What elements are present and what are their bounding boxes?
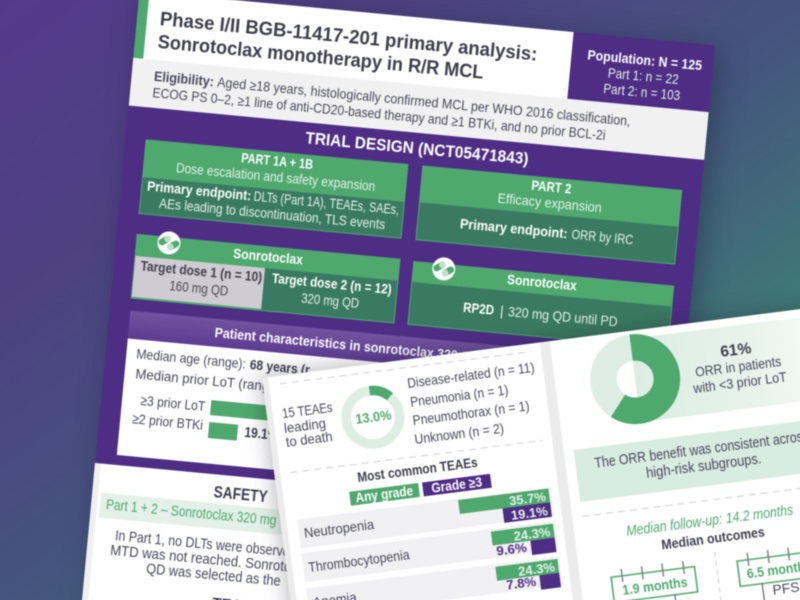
text: TEAEs leading to death: to death [285, 428, 333, 450]
eligibility [129, 58, 709, 160]
text: TEAEs leading to death: leading [283, 415, 327, 436]
panel: ORR in patients with fewer than 3 prior LoT [599, 311, 800, 426]
panel: part 2 [415, 165, 682, 265]
list: causes of death: Unknown (n = 2) [413, 420, 505, 447]
panel: ORR in patients with fewer than 3 prior LoT: ORR in patients [694, 353, 782, 380]
heading: trial design: TRIAL DESIGN (NCT05471843) [305, 129, 529, 168]
panel: sonrotoclax doses part 1: Sonrotoclax [233, 245, 304, 268]
panel: sonrotoclax RP2D part 2 [407, 261, 674, 349]
panel: sonrotoclax RP2D part 2: Sonrotoclax [506, 271, 578, 293]
legend [349, 473, 492, 506]
title block: Phase I/II BGB-11417-201 primary analysis: [159, 8, 538, 66]
panel: patient characteristics: Patient characteristics in sonrotoclax 320 mg QD [214, 324, 502, 367]
list: causes of death: Pneumonia (n = 1) [409, 381, 509, 410]
row: thrombocytopenia: Thrombocytopenia [307, 546, 411, 575]
panel: safety: In Part 1, no DLTs were observed [114, 527, 297, 561]
icon: capsules [156, 230, 182, 255]
panel: part 1A + 1B: DLTs (Part 1A), TEAEs, SAEs, [253, 188, 400, 217]
panel: part 2: PART 2 [531, 177, 572, 197]
calendar: 6.5 months [736, 543, 800, 600]
sheet: TEAE and efficacy results [262, 299, 800, 600]
list: causes of death: Disease-related (n = 11) [406, 359, 535, 391]
panel: patient characteristics: ≥2 prior BTKi [132, 410, 204, 433]
legend: Grade ≥3 [430, 474, 483, 496]
title block [133, 0, 574, 99]
population box: Part 1: n = 22 [607, 65, 680, 87]
panel: sonrotoclax doses part 1 [131, 234, 401, 323]
panel: patient characteristics: 19.1% [244, 425, 279, 444]
row: neutropenia [297, 487, 554, 550]
panel: part 1A + 1B: Primary endpoint: [147, 178, 252, 203]
panel: part 2: Efficacy expansion [497, 190, 602, 215]
panel: patient characteristics: ≥3 prior LoT [140, 392, 206, 414]
calendar: 1.9 months: 1.9 months [621, 574, 689, 598]
row: thrombocytopenia: 9.6% [495, 540, 528, 559]
panel: part 1A + 1B: PART 1A + 1B [241, 149, 314, 172]
callout: ORR benefit: high-risk subgroups. [645, 451, 762, 482]
text: TEAEs leading to death [281, 399, 337, 450]
panel: sonrotoclax RP2D part 2: 320 mg QD until PD [507, 303, 618, 329]
row: thrombocytopenia [302, 521, 558, 584]
row: anemia: 24.3% [517, 559, 556, 579]
panel: part 1A + 1B: AEs leading to discontinuation, TLS events [158, 195, 386, 232]
panel: ORR in patients with fewer than 3 prior LoT: 61% [719, 340, 753, 361]
list: causes of death: Pneumothorax (n = 1) [412, 397, 530, 428]
text: TEAEs leading to death: 15 TEAEs [281, 399, 333, 421]
list: causes of death [406, 359, 542, 447]
eligibility: ECOG PS 0–2, ≥1 line of anti-CD20-based therapy and ≥1 BTKi, and no prior BCL-2i [152, 84, 606, 143]
population box [584, 47, 703, 105]
row: neutropenia: 35.7% [508, 489, 547, 509]
panel: patient characteristics: 68 years (r [249, 356, 311, 378]
panel: patient characteristics: Median prior LoT (range) [135, 365, 282, 395]
panel: safety: QD was selected as the [145, 560, 281, 590]
panel: safety [76, 463, 670, 600]
panel: sonrotoclax doses part 1: 320 mg QD [301, 290, 360, 311]
panel: safety: MTD was not reached. Sonrotoclax [110, 542, 316, 578]
population box: Population: N = 125 [587, 47, 703, 73]
calendar: 1.9 months [610, 560, 702, 600]
row: anemia: 7.8% [505, 574, 537, 593]
panel: sonrotoclax doses part 1: Target dose 1 (n = 10) [140, 257, 263, 285]
legend: Any grade [355, 483, 414, 506]
row: neutropenia: 19.1% [510, 503, 549, 523]
eligibility: Eligibility: [153, 68, 215, 89]
sheet: trial design and safety [76, 0, 715, 600]
panel: sonrotoclax RP2D part 2: RP2D [463, 299, 495, 318]
calendar: 6.5 months: PFS [772, 579, 800, 598]
heading: most common TEAEs: Most common TEAEs [356, 454, 479, 485]
panel: part 1A + 1B [139, 139, 408, 239]
population box: Part 2: n = 103 [603, 80, 681, 103]
row: thrombocytopenia: 24.3% [513, 524, 552, 544]
donut: 13.0%: 13.0% [354, 406, 393, 427]
panel: sonrotoclax doses part 1: Target dose 2 (n = 12) [271, 270, 392, 297]
panel: safety: SAFETY [213, 483, 268, 506]
panel: sonrotoclax RP2D part 2: | [499, 302, 504, 319]
panel: ORR in patients with fewer than 3 prior LoT: with <3 prior LoT [691, 368, 788, 396]
panel: part 2: Primary endpoint: [459, 215, 568, 241]
panel: patient characteristics [117, 311, 665, 505]
panel: part 2: ORR by IRC [571, 226, 634, 248]
panel: patient characteristics: Median age (range): [136, 345, 247, 372]
title block: Sonrotoclax monotherapy in R/R MCL [157, 31, 485, 84]
panel: part 1A + 1B: Dose escalation and safety expansion [175, 159, 376, 194]
callout: ORR benefit [574, 414, 800, 502]
panel: sonrotoclax doses part 1: 160 mg QD [169, 277, 229, 299]
icon: capsules [431, 256, 456, 281]
bar chart: TEAEs [297, 487, 563, 600]
heading: median outcomes: Median outcomes [660, 523, 766, 553]
row: anemia [306, 556, 563, 600]
eligibility: Aged ≥18 years, histologically confirmed MCL per WHO 2016 classification, [217, 74, 631, 129]
panel: safety: Part 1 + 2 – Sonrotoclax 320 mg [105, 497, 277, 529]
row: neutropenia: Neutropenia [303, 516, 375, 541]
donut: 13.0% [343, 387, 403, 447]
